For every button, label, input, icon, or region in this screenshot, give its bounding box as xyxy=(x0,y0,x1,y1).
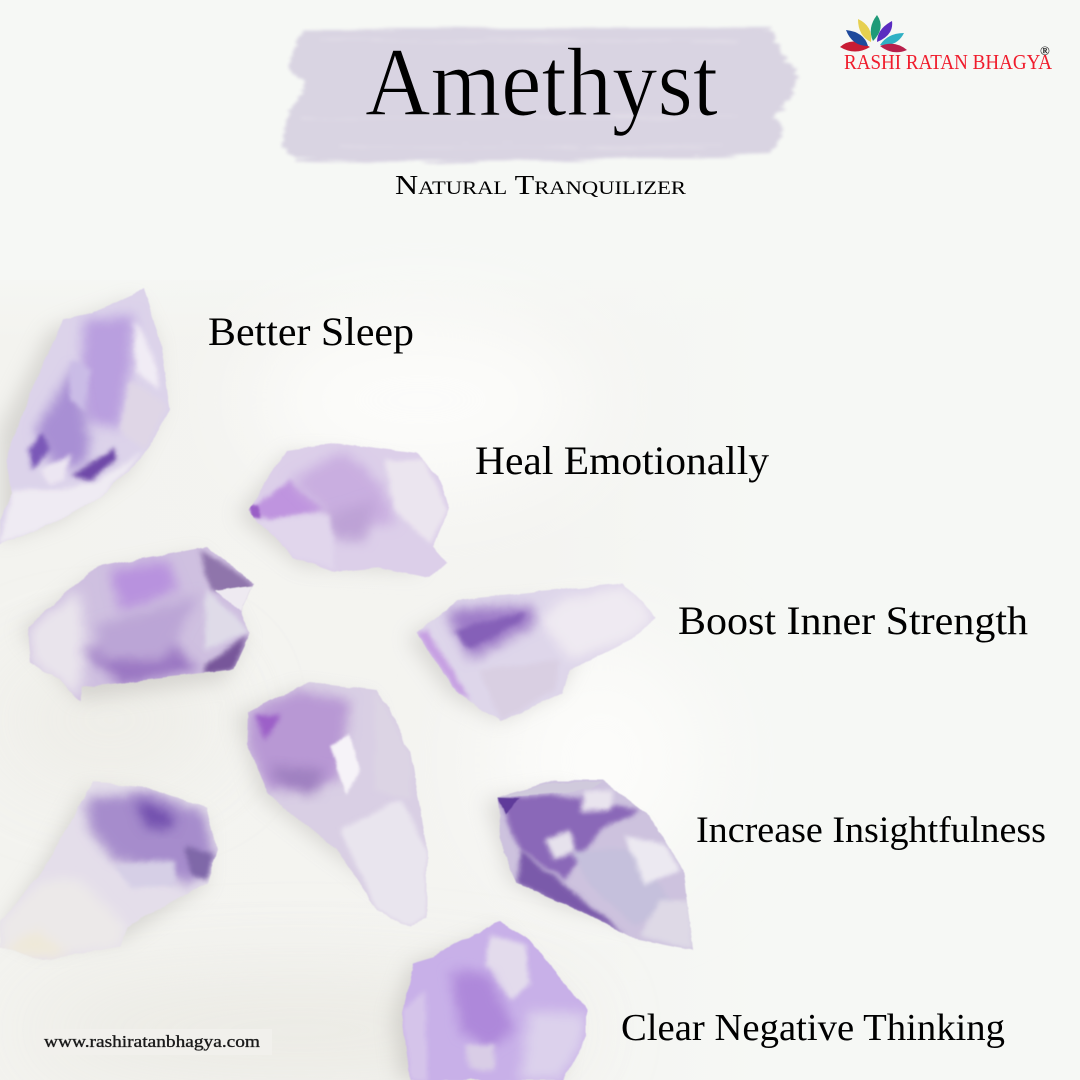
label: Boost Inner Strength: Boost Inner Strength xyxy=(678,598,1028,643)
subtitle: Natural Tranquilizer xyxy=(395,170,686,200)
crystal 8 xyxy=(402,922,587,1080)
website footer xyxy=(36,1029,272,1055)
crystal 7 xyxy=(497,780,693,950)
brush stroke behind title xyxy=(282,28,798,162)
registered mark: ® xyxy=(1040,43,1050,58)
crystal 6 xyxy=(0,782,218,960)
crystal 4 xyxy=(417,583,657,722)
label: Heal Emotionally: Heal Emotionally xyxy=(475,438,769,483)
crystal shadows xyxy=(0,300,660,1080)
title: Amethyst xyxy=(365,29,718,137)
website footer: www.rashiratanbhagya.com xyxy=(44,1032,260,1051)
crystal 3 xyxy=(27,547,253,702)
crystal 1 xyxy=(0,289,170,545)
crystal 5 xyxy=(247,682,427,928)
label: Clear Negative Thinking: Clear Negative Thinking xyxy=(621,1007,1005,1049)
logo wordmark: RASHI RATAN BHAGYA xyxy=(844,50,1053,74)
icon: gem petals xyxy=(840,15,907,52)
label: Increase Insightfulness: Increase Insightfulness xyxy=(696,810,1046,851)
label: Better Sleep: Better Sleep xyxy=(208,309,414,354)
logo: Rashi Ratan Bhagya xyxy=(840,15,1053,74)
crystal 2 xyxy=(248,443,450,578)
